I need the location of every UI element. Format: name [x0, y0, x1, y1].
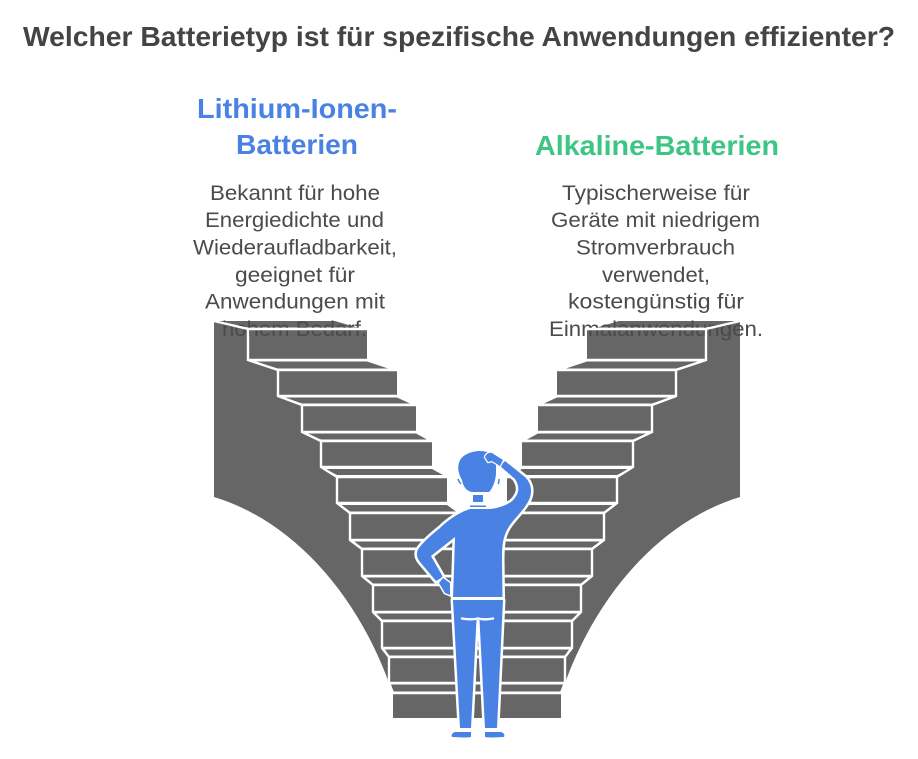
right staircase fill [476, 321, 740, 718]
text block: Alkaline description: kostengünstig für [568, 290, 744, 314]
heading: Lithium-Ionen-Batterien: Batterien [236, 129, 358, 160]
collar [470, 506, 486, 507]
right staircase step outlines [476, 321, 740, 693]
figure: person scratching head [417, 451, 531, 737]
text block: Alkaline description: verwendet, [602, 264, 710, 287]
shoes [452, 732, 504, 737]
heading: Lithium-Ionen-Batterien: Lithium-Ionen- [197, 93, 397, 124]
text block: Alkaline description: Geräte mit niedrigem [551, 209, 760, 232]
text block: Lithium-Ionen description: Bekannt für hohe [210, 182, 380, 205]
pocket line [462, 617, 493, 621]
text block: Lithium-Ionen description: Anwendungen mit [205, 290, 385, 314]
ears [458, 479, 499, 484]
text block: Lithium-Ionen description: Energiedichte und [205, 209, 384, 232]
heading: Alkaline-Batterien: Alkaline-Batterien [535, 130, 779, 161]
left staircase step outlines [214, 321, 478, 693]
neck [473, 495, 483, 502]
text block: Alkaline description: Stromverbrauch [576, 236, 735, 260]
hand on hip [439, 578, 450, 595]
text block: Alkaline description [549, 182, 763, 341]
left staircase fill [214, 321, 478, 718]
pants [453, 600, 503, 728]
torso and arms [417, 461, 531, 597]
hand on head [485, 453, 503, 466]
title: Welcher Batterietyp ist für spezifische Anwendungen effizienter? [23, 21, 895, 52]
text block: Lithium-Ionen description: geeignet für [235, 264, 355, 287]
text block: Lithium-Ionen description [193, 182, 397, 341]
heading: Lithium-Ionen-Batterien [197, 93, 397, 160]
text block: Lithium-Ionen description: Wiederaufladbarkeit, [193, 236, 397, 260]
head [458, 451, 496, 492]
text block: Alkaline description: Typischerweise für [562, 182, 750, 205]
text block: Lithium-Ionen description: hohem Bedarf. [222, 318, 367, 341]
text block: Alkaline description: Einmalanwendungen. [549, 318, 763, 341]
